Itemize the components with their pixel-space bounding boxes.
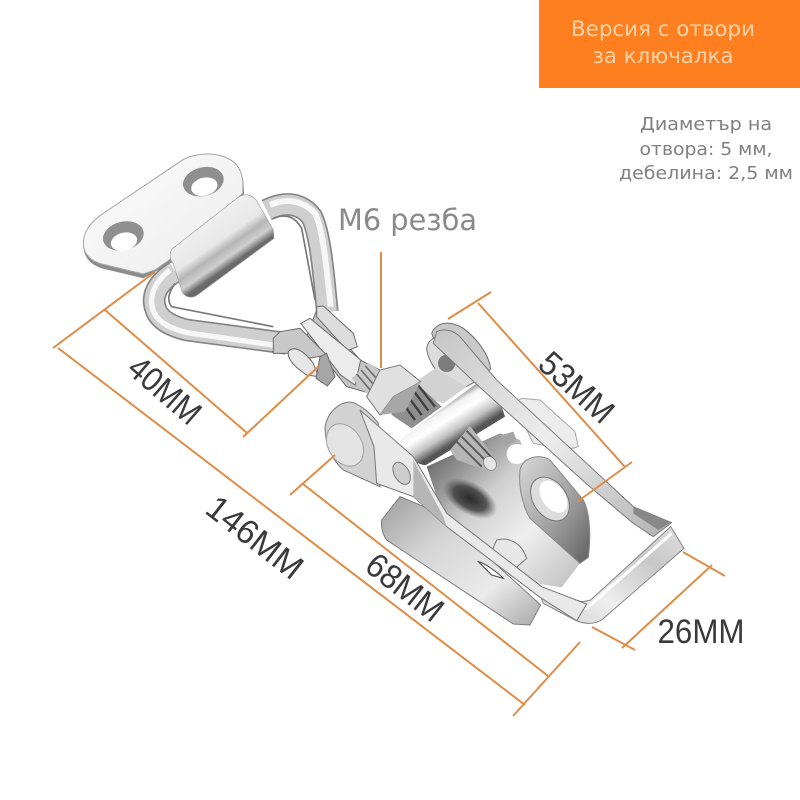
dimension: 53MM [448,292,632,502]
spec text: hole diameter and thickness: Диаметър на [640,114,772,135]
dimension lines [53,252,725,716]
label: 26MM: 26MM [658,613,744,651]
spec text: hole diameter and thickness [619,114,793,184]
icon: keyhole lug with hole [520,457,590,563]
badge text: Версия с отвори [571,17,755,42]
icon: hook and mounting plate assembly [83,154,380,393]
dimension: 68MM [290,455,548,676]
spec text: hole diameter and thickness: дебелина: 2,5 мм [619,163,793,184]
icon: threaded rod end [352,363,385,395]
orange badge [539,0,800,88]
icon: cross cylinder [401,383,505,465]
dimension: 40MM [53,272,320,437]
icon: triangular mounting plate [83,154,244,278]
icon: hex nut and thread [367,365,442,428]
icon: latch assembly [319,323,684,625]
icon: middle plate [427,432,580,587]
label: 68MM: 68MM [358,546,451,630]
icon: lever handle loop [433,330,684,623]
icon: flattened fork [273,306,361,386]
icon: latch base plate [381,497,541,625]
label: 53MM: 53MM [531,344,622,431]
label: 146MM: 146MM [199,488,310,587]
dimension: 146MM [58,348,580,716]
icon: crimped sleeve on hook [170,195,274,297]
icon: upper base plate edge [513,398,578,450]
icon: lower lever arm and pivot rivet [319,402,587,621]
icon: triangular wire hook [152,201,331,346]
label: M6 thread: M6 резба [338,203,477,237]
M6 leader [380,252,382,368]
orange badge: за ключалка [592,44,734,69]
spec text: hole diameter and thickness: отвора: 5 мм, [640,139,772,160]
dimension: 26MM [592,552,725,650]
label: 40MM: 40MM [120,349,209,433]
icon: short threaded bolt [450,426,499,473]
icon: upper lever pivot [418,323,491,403]
icon: threaded rod link [307,310,380,393]
